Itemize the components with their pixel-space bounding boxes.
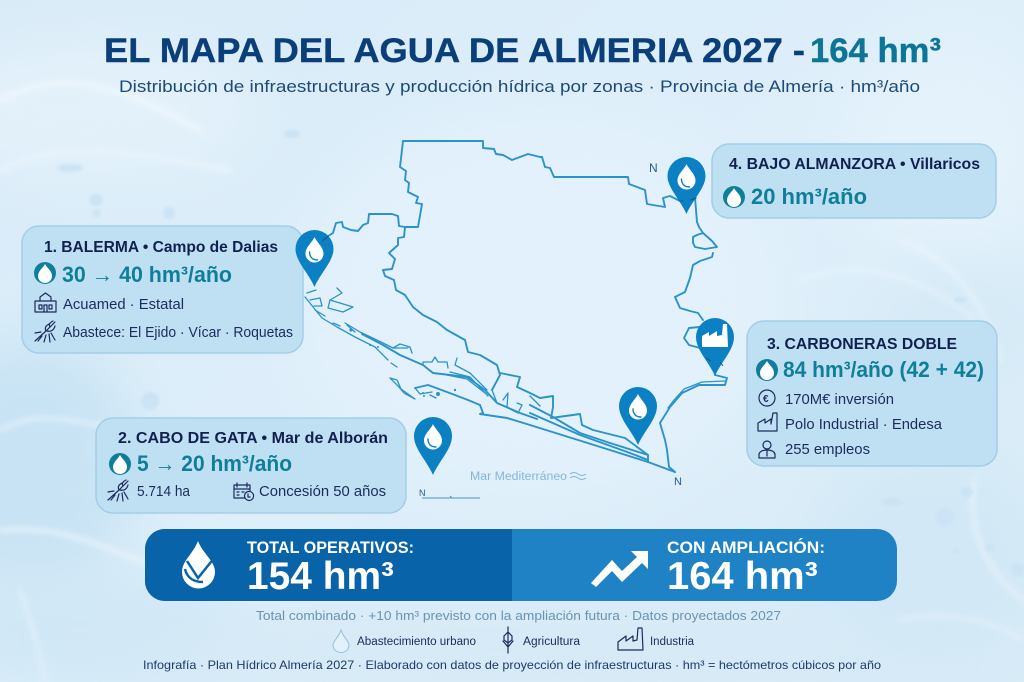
province outline bbox=[325, 141, 717, 348]
icon: factory bbox=[758, 413, 777, 431]
label: TOTAL OPERATIVOS: bbox=[247, 539, 414, 557]
production value: 20 hm³/año bbox=[751, 184, 867, 209]
western strip bbox=[362, 334, 537, 419]
legend bbox=[333, 627, 695, 653]
panel: Carboneras bbox=[747, 321, 997, 466]
icon: wheat field bbox=[108, 480, 128, 501]
icon: institution bbox=[35, 293, 56, 312]
panel heading: 3. CARBONERAS DOBLE bbox=[767, 336, 957, 353]
icon: euro bbox=[759, 390, 775, 406]
icon: urban supply drop bbox=[333, 630, 349, 653]
pin: Balerma bbox=[296, 230, 334, 287]
operator text: Acuamed · Estatal bbox=[63, 296, 184, 313]
panel: con ampliación bbox=[591, 538, 825, 598]
sea label: Mar Mediterráneo bbox=[470, 471, 567, 483]
panel: Bajo Almanzora bbox=[712, 144, 996, 218]
title: EL MAPA DEL AGUA DE ALMERIA 2027 - bbox=[104, 32, 805, 70]
area text: 5.714 ha bbox=[137, 483, 191, 500]
western islands bbox=[390, 378, 415, 399]
panel: Cabo de Gata bbox=[96, 418, 406, 513]
summary bar bbox=[145, 529, 897, 601]
scale bar bbox=[419, 488, 480, 498]
south coast lower edge bbox=[415, 385, 648, 462]
icon: agriculture wheat bbox=[503, 627, 513, 653]
icon: industry factory bbox=[618, 628, 643, 650]
title: 164 hm³ bbox=[810, 32, 941, 70]
production value: 84 hm³/año (42 + 42) bbox=[783, 357, 984, 382]
panel heading: 4. BAJO ALMANZORA • Villaricos bbox=[729, 156, 980, 173]
pin: Carboneras industry bbox=[696, 318, 734, 376]
north label near Almanzora: N bbox=[649, 161, 658, 175]
footer: Infografía · Plan Hídrico Almería 2027 · Elaborado con datos de proyección de infraestructuras · hm³ = hectómetros cúbicos por año bbox=[143, 658, 881, 672]
value: 154 hm³ bbox=[247, 555, 394, 598]
concession text: Concesión 50 años bbox=[259, 483, 386, 500]
value: 164 hm³ bbox=[667, 555, 818, 598]
icon: drop with check bbox=[182, 541, 220, 588]
icon: water drop bbox=[109, 453, 131, 475]
icon: worker bbox=[759, 441, 775, 458]
panel heading: 2. CABO DE GATA • Mar de Alborán bbox=[118, 430, 388, 447]
investment text: 170M€ inversión bbox=[785, 391, 894, 408]
industry text: Polo Industrial · Endesa bbox=[785, 416, 943, 433]
north label near Cabo: N bbox=[674, 476, 682, 488]
jobs text: 255 empleos bbox=[785, 441, 870, 458]
legend label urban: Abastecimiento urbano bbox=[357, 636, 476, 648]
panel: Balerma bbox=[22, 226, 303, 353]
legend label agriculture: Agricultura bbox=[523, 636, 581, 648]
panel: total operativos bbox=[145, 529, 512, 601]
panel heading: 1. BALERMA • Campo de Dalias bbox=[44, 239, 278, 256]
icon: water drop bbox=[756, 359, 778, 381]
production value: 5 → 20 hm³/año bbox=[137, 451, 292, 476]
map of Almería province bbox=[305, 141, 727, 472]
label: CON AMPLIACIÓN: bbox=[667, 538, 825, 557]
south coast upper edge bbox=[500, 373, 675, 472]
note text: Total combinado · +10 hm³ previsto con la ampliación futura · Datos proyectados 2027 bbox=[256, 609, 781, 623]
island specks bbox=[349, 328, 456, 397]
interior boundary bbox=[383, 227, 500, 390]
icon: calendar bbox=[234, 483, 254, 500]
subtitle: Distribución de infraestructuras y producción hídrica por zonas · Provincia de Almería · hm³/año bbox=[119, 77, 920, 96]
icon: euro: € bbox=[763, 394, 769, 405]
pin: Almería coast bbox=[619, 387, 657, 445]
scale bar: N bbox=[419, 488, 426, 498]
legend label industry: Industria bbox=[650, 636, 695, 648]
icon: water drop bbox=[723, 186, 745, 208]
icon: rising arrow bbox=[591, 551, 648, 587]
production value: 30 → 40 hm³/año bbox=[62, 262, 232, 287]
coastline east bbox=[660, 375, 727, 472]
supply text: Abastece: El Ejido · Vícar · Roquetas bbox=[63, 324, 293, 341]
icon: wheat field bbox=[35, 321, 55, 342]
pin: Cabo de Gata bbox=[414, 417, 452, 475]
icon: water drop bbox=[34, 262, 56, 284]
pin: Bajo Almanzora bbox=[668, 157, 706, 214]
